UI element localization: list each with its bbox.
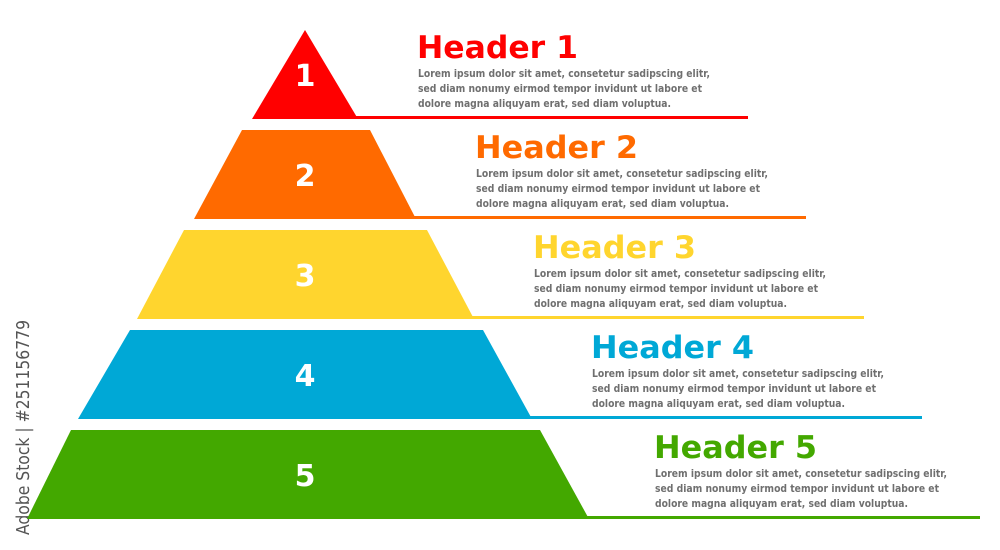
text 3: Lorem ipsum dolor sit amet, consetetur sadipscing elitr, [534, 267, 826, 280]
header 5: Header 5 [654, 430, 817, 466]
tier 2: 2 [295, 159, 315, 194]
text 1: Lorem ipsum dolor sit amet, consetetur sadipscing elitr, [418, 67, 710, 80]
text 4: dolore magna aliquyam erat, sed diam voluptua. [592, 397, 845, 410]
header 4: Header 4 [591, 330, 754, 366]
text 3: sed diam nonumy eirmod tempor invidunt ut labore et [534, 282, 818, 295]
header 2: Header 2 [475, 130, 638, 166]
tier 1: 1 [295, 59, 315, 94]
text 2: Lorem ipsum dolor sit amet, consetetur sadipscing elitr, [476, 167, 768, 180]
text 2: sed diam nonumy eirmod tempor invidunt ut labore et [476, 182, 760, 195]
tier 3 [137, 230, 864, 319]
tier 2 [194, 130, 806, 219]
text 5 [655, 467, 947, 510]
tier 5: 5 [295, 459, 315, 494]
tier 4: 4 [295, 359, 315, 394]
tier 1 [252, 30, 748, 119]
text 5: dolore magna aliquyam erat, sed diam voluptua. [655, 497, 908, 510]
watermark: side text: Adobe Stock | #251156779 [13, 320, 34, 535]
text 2 [476, 167, 768, 210]
text 5: Lorem ipsum dolor sit amet, consetetur sadipscing elitr, [655, 467, 947, 480]
text 4 [592, 367, 884, 410]
text 3: dolore magna aliquyam erat, sed diam voluptua. [534, 297, 787, 310]
text 1: dolore magna aliquyam erat, sed diam voluptua. [418, 97, 671, 110]
tier 3: 3 [295, 259, 315, 294]
text 4: sed diam nonumy eirmod tempor invidunt ut labore et [592, 382, 876, 395]
header 1: Header 1 [417, 30, 578, 66]
tier 5 [27, 430, 980, 519]
text 5: sed diam nonumy eirmod tempor invidunt ut labore et [655, 482, 939, 495]
text 2: dolore magna aliquyam erat, sed diam voluptua. [476, 197, 729, 210]
header 3: Header 3 [533, 230, 696, 266]
text 1: sed diam nonumy eirmod tempor invidunt ut labore et [418, 82, 702, 95]
text 3 [534, 267, 826, 310]
tier 4 [78, 330, 922, 419]
text 1 [418, 67, 710, 110]
text 4: Lorem ipsum dolor sit amet, consetetur sadipscing elitr, [592, 367, 884, 380]
